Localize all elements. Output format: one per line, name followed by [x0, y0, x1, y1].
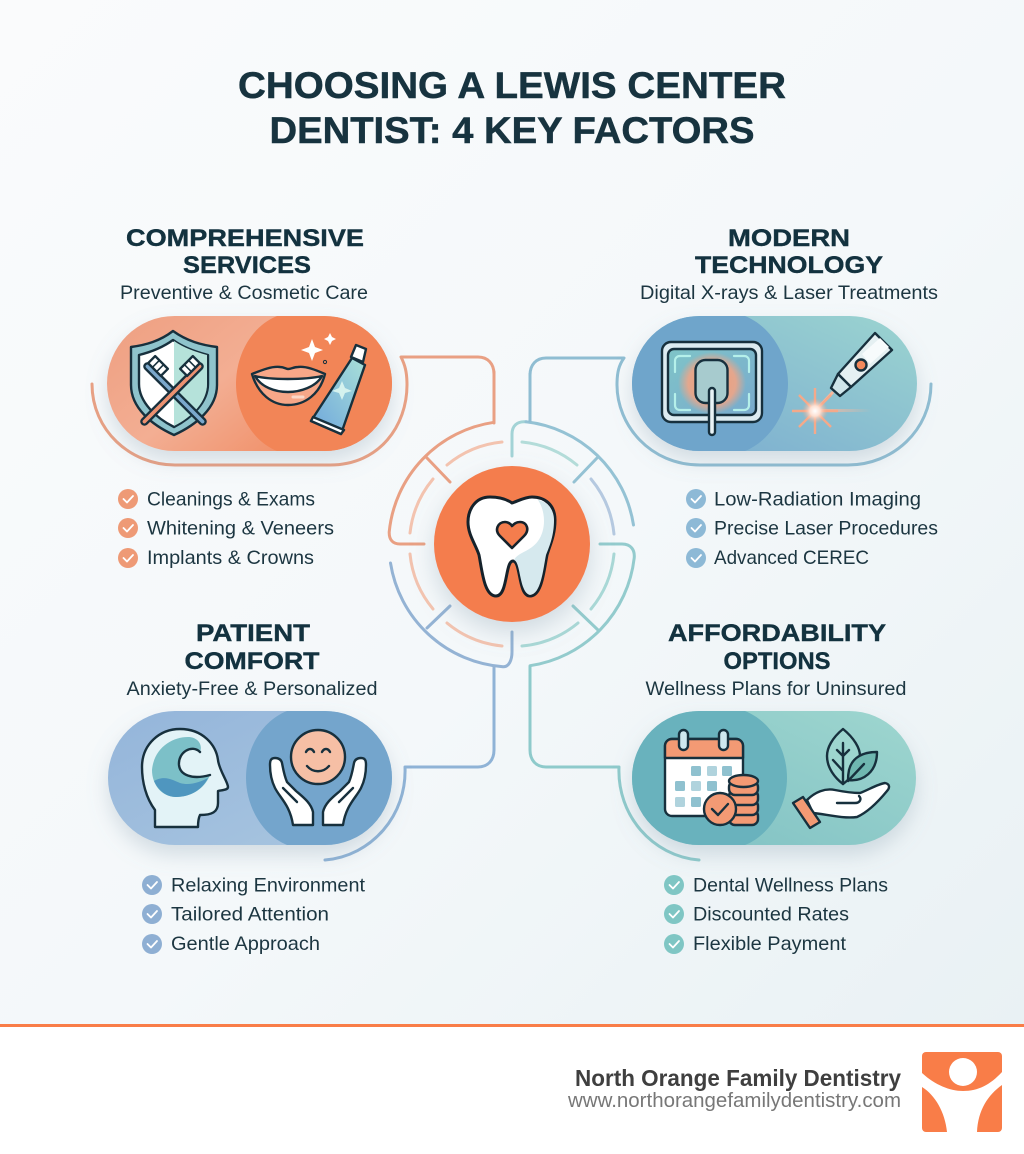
icon: head with wave [142, 729, 228, 827]
checklist [664, 874, 888, 955]
title: CHOOSING A LEWIS CENTER [238, 65, 786, 106]
icon: laser spark [792, 388, 871, 434]
ring: orange segment [389, 372, 494, 544]
heading [184, 620, 320, 675]
checklist [118, 488, 334, 569]
heading: COMPREHENSIVE [126, 225, 364, 252]
icon: leaves [827, 729, 877, 784]
heading [668, 620, 886, 675]
subtitle: Preventive & Cosmetic Care [120, 283, 368, 304]
footer [0, 1024, 1024, 1154]
icon: smiley [291, 730, 345, 784]
pill [632, 316, 917, 451]
icon: caring hands [270, 758, 366, 825]
icon: digital x-ray sensor [662, 342, 762, 435]
heading: AFFORDABILITY [668, 620, 886, 647]
panel: modern technology [530, 225, 938, 569]
item: Gentle Approach [171, 933, 320, 955]
icon: open hand [793, 783, 889, 828]
item: Relaxing Environment [171, 874, 366, 896]
subtitle: Wellness Plans for Uninsured [646, 679, 906, 700]
connector [325, 670, 494, 860]
connector [530, 358, 931, 465]
central hub with rings [389, 372, 634, 700]
pill [108, 711, 392, 845]
subtitle: Digital X-rays & Laser Treatments [640, 283, 938, 304]
icon: sparkles [301, 333, 336, 364]
title [238, 65, 786, 151]
item: Tailored Attention [171, 904, 329, 926]
checklist [142, 874, 366, 955]
icon: laser pen [831, 333, 892, 396]
subtitle: Anxiety-Free & Personalized [126, 679, 378, 700]
heading: OPTIONS [724, 648, 830, 675]
checklist [686, 488, 938, 569]
item: Cleanings & Exams [147, 488, 315, 510]
heading: TECHNOLOGY [695, 252, 883, 279]
heading: MODERN [728, 225, 850, 252]
item: Discounted Rates [693, 904, 849, 926]
item: Implants & Crowns [147, 547, 314, 569]
heading: PATIENT [196, 620, 310, 647]
item: Advanced CEREC [714, 547, 869, 569]
item: Low-Radiation Imaging [714, 488, 921, 510]
panel: affordability options [530, 620, 916, 955]
brand name: North Orange Family Dentistry [575, 1065, 901, 1091]
heading [126, 225, 364, 279]
pill [107, 316, 392, 451]
heading [695, 225, 883, 279]
center circle [434, 466, 590, 622]
icon: shield with toothbrushes [131, 331, 217, 435]
icon: calendar and coins [665, 730, 758, 825]
panel: patient comfort [108, 620, 494, 955]
icon: tooth with heart [468, 497, 555, 596]
heading: SERVICES [183, 252, 311, 279]
connector [530, 667, 699, 860]
ring: bottom-left segment [390, 563, 512, 690]
ring: top-right segment [512, 374, 634, 525]
ring: inner dashes [410, 442, 614, 646]
panel: comprehensive services [92, 225, 494, 569]
heading: COMFORT [184, 648, 320, 675]
item: Precise Laser Procedures [714, 518, 938, 540]
item: Flexible Payment [693, 933, 847, 955]
pill [632, 711, 916, 845]
icon: toothpaste tube [311, 345, 366, 434]
logo [922, 1052, 1002, 1132]
title: DENTIST: 4 KEY FACTORS [270, 110, 754, 151]
item: Dental Wellness Plans [693, 874, 888, 896]
item: Whitening & Veneers [147, 518, 334, 540]
ring: bottom-right segment [530, 544, 634, 700]
website: www.northorangefamilydentistry.com [567, 1090, 901, 1112]
connector [92, 357, 494, 465]
icon: smile [252, 367, 325, 405]
